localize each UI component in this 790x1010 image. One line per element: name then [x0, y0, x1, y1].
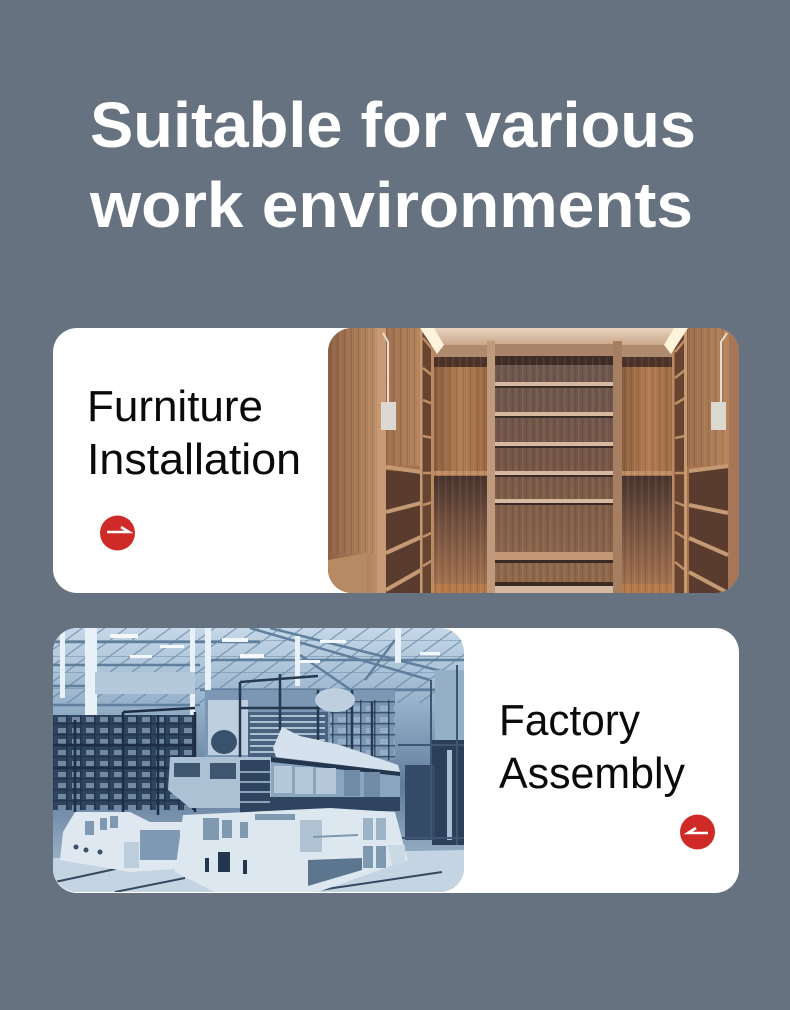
centre shelves	[495, 356, 613, 593]
heading: factory assembly	[499, 696, 685, 798]
posts	[487, 341, 495, 593]
white machine front	[175, 808, 408, 892]
ceiling lights	[420, 328, 444, 354]
left dark racks	[53, 715, 195, 810]
panel: furniture installation	[53, 328, 739, 593]
icon: red arrow right	[100, 516, 135, 550]
floor	[53, 850, 464, 892]
heading: factory assembly: Factory	[499, 696, 640, 745]
roof structure	[53, 628, 464, 710]
white machine left	[60, 812, 190, 872]
van body	[168, 757, 272, 808]
right wing	[728, 328, 739, 593]
left wing	[328, 328, 378, 593]
heading: furniture installation: Installation	[87, 435, 301, 484]
title: work environments	[89, 169, 693, 241]
photo: wooden wardrobe	[328, 328, 739, 593]
title	[89, 89, 696, 241]
icon: red arrow left	[680, 814, 715, 850]
covered load	[273, 727, 400, 772]
lift fittings	[381, 402, 396, 430]
heading: factory assembly: Assembly	[499, 749, 685, 798]
centre scaffolding	[205, 690, 395, 760]
heading: furniture installation: Furniture	[87, 382, 263, 431]
right columns	[435, 670, 464, 740]
title: Suitable for various	[90, 89, 696, 161]
heading: furniture installation	[87, 382, 301, 484]
panel: factory assembly	[53, 628, 739, 893]
side doors	[434, 357, 488, 367]
photo: factory floor	[53, 628, 464, 892]
